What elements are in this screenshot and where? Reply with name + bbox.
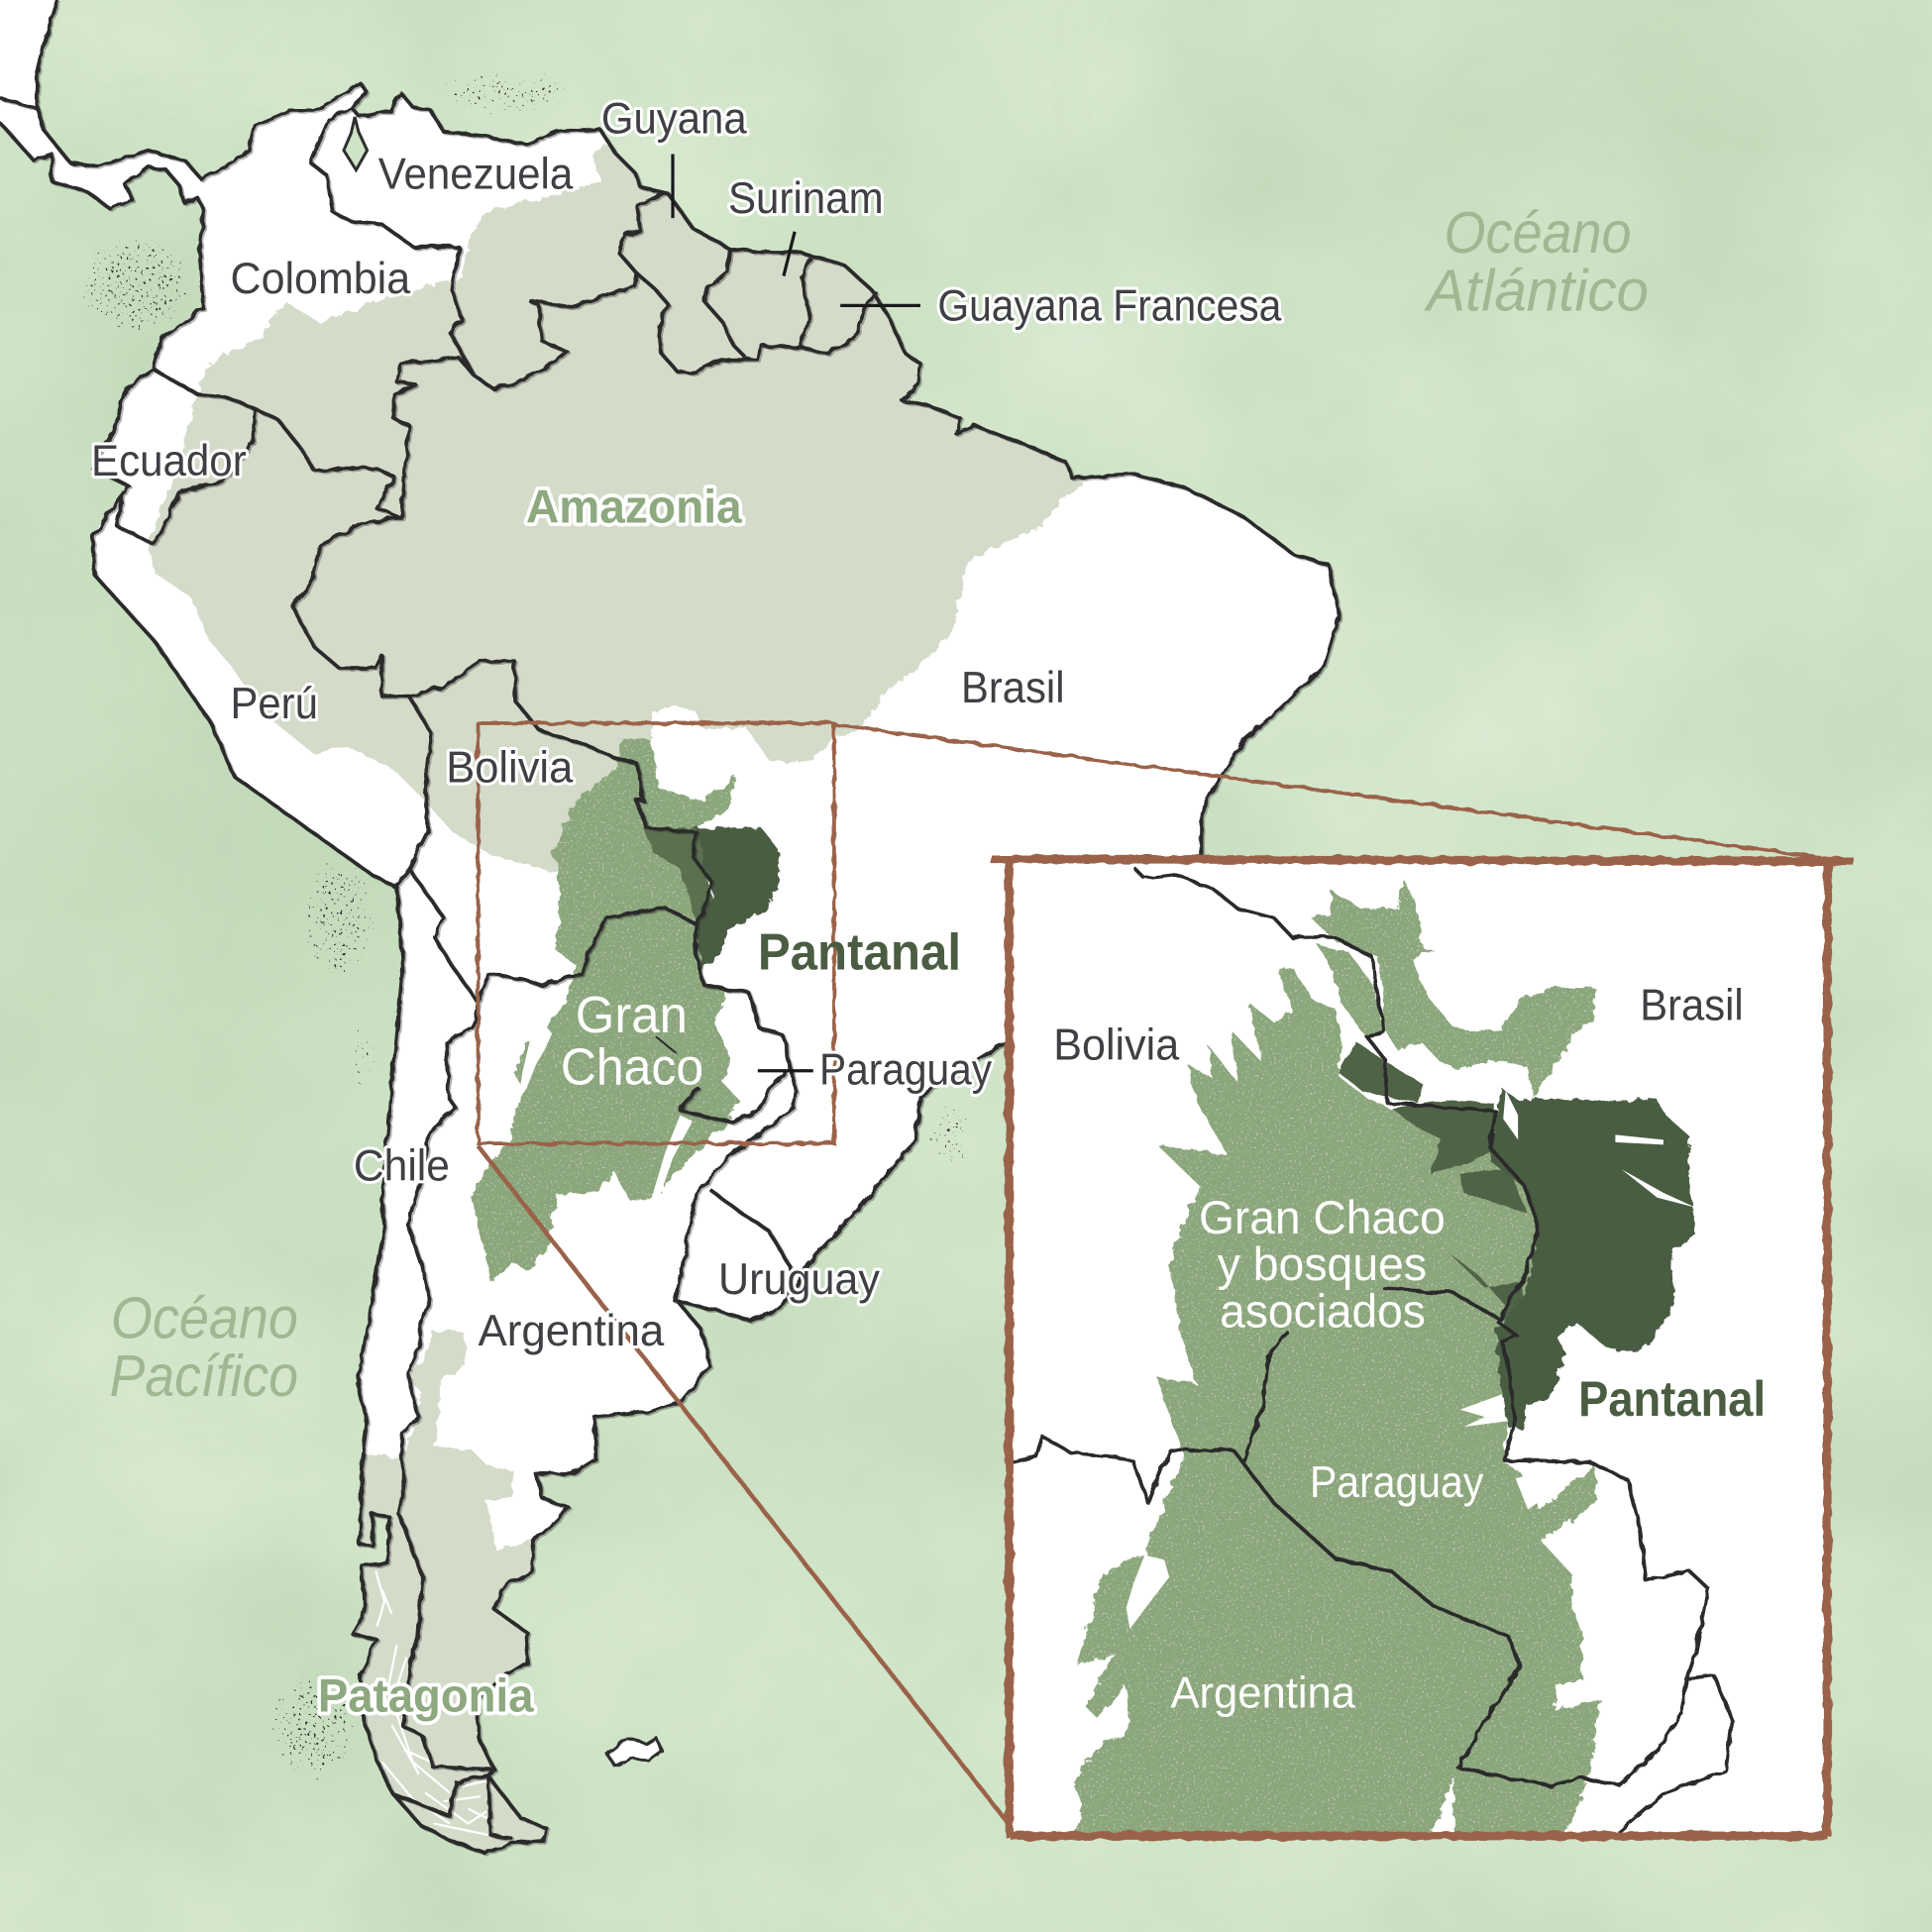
map labels: Ecuador: [91, 436, 247, 485]
region label: Patagonia: Patagonia: [318, 1669, 534, 1722]
pointer lines: [673, 154, 920, 1071]
inset Chaco: main body: [1073, 967, 1600, 1838]
map labels: [91, 93, 1281, 1355]
map labels: Bolivia: [446, 743, 573, 793]
region: Amazonia: [148, 123, 1109, 872]
country borders on main map: [0, 0, 1342, 1855]
region label: Gran Chaco: [561, 987, 703, 1096]
map labels: Paraguay: [819, 1044, 993, 1094]
Malvinas island: [607, 1738, 662, 1766]
map labels: Uruguay: [718, 1254, 881, 1304]
ocean label: Pacific: [110, 1285, 298, 1409]
inset labels: Pantanal: [1578, 1371, 1766, 1427]
region label: Pantanal: Pantanal: [758, 924, 961, 982]
map labels: Guayana Francesa: [937, 280, 1281, 330]
ocean label: Atlantic: Atlántico: [1424, 257, 1649, 323]
region: Pantanal on main map: [643, 828, 779, 967]
fjords of southern Chile: [376, 1571, 492, 1836]
map labels: Chile: [354, 1140, 450, 1190]
zoom frame on map: [479, 723, 1821, 1826]
inset panel: [991, 859, 1853, 1838]
inset country borders: [1012, 869, 1733, 1831]
ink splatter around the coast: [61, 53, 988, 1799]
map labels: Venezuela: [378, 149, 573, 198]
ocean label: Atlantic: Océano: [1445, 199, 1632, 266]
inset labels: Brasil: [1640, 981, 1744, 1030]
ocean label: Pacific: Océano: [111, 1285, 298, 1351]
region label: Amazonia: Amazonia: [526, 481, 742, 533]
inset labels: Argentina: [1170, 1668, 1355, 1718]
ocean label: Pacific: Pacífico: [110, 1342, 298, 1409]
inset labels: asociados: [1220, 1285, 1426, 1338]
South America land mass: [0, 0, 1340, 1853]
inset labels: [1053, 981, 1766, 1718]
ocean label: Atlantic: [1424, 199, 1649, 323]
inset labels: Gran Chaco: [1199, 1192, 1446, 1244]
inset rough frame: [991, 859, 1853, 1837]
map labels: Surinam: [728, 173, 884, 223]
inset Chaco: northern lobe: [1311, 879, 1594, 1097]
map labels: Argentina: [479, 1306, 664, 1355]
inset white gaps in Chaco: [1127, 1389, 1555, 1629]
region label: Gran Chaco: Chaco: [561, 1038, 703, 1096]
inset labels: Bolivia: [1053, 1020, 1179, 1070]
region label: Gran Chaco: Gran: [576, 987, 688, 1044]
region: Patagonia: [355, 1330, 545, 1851]
inset Pantanal: [1339, 1041, 1695, 1431]
inset labels: Paraguay: [1310, 1457, 1484, 1507]
Maracaibo lake: [344, 117, 368, 170]
map labels: Perú: [231, 679, 318, 728]
region: Gran Chaco on main map: [471, 739, 740, 1283]
map labels: Colombia: [231, 254, 410, 303]
map labels: Brasil: [961, 663, 1064, 712]
map labels: Guyana: [601, 93, 747, 143]
inset labels: y bosques: [1218, 1238, 1427, 1291]
coastline: [0, 0, 1340, 1853]
